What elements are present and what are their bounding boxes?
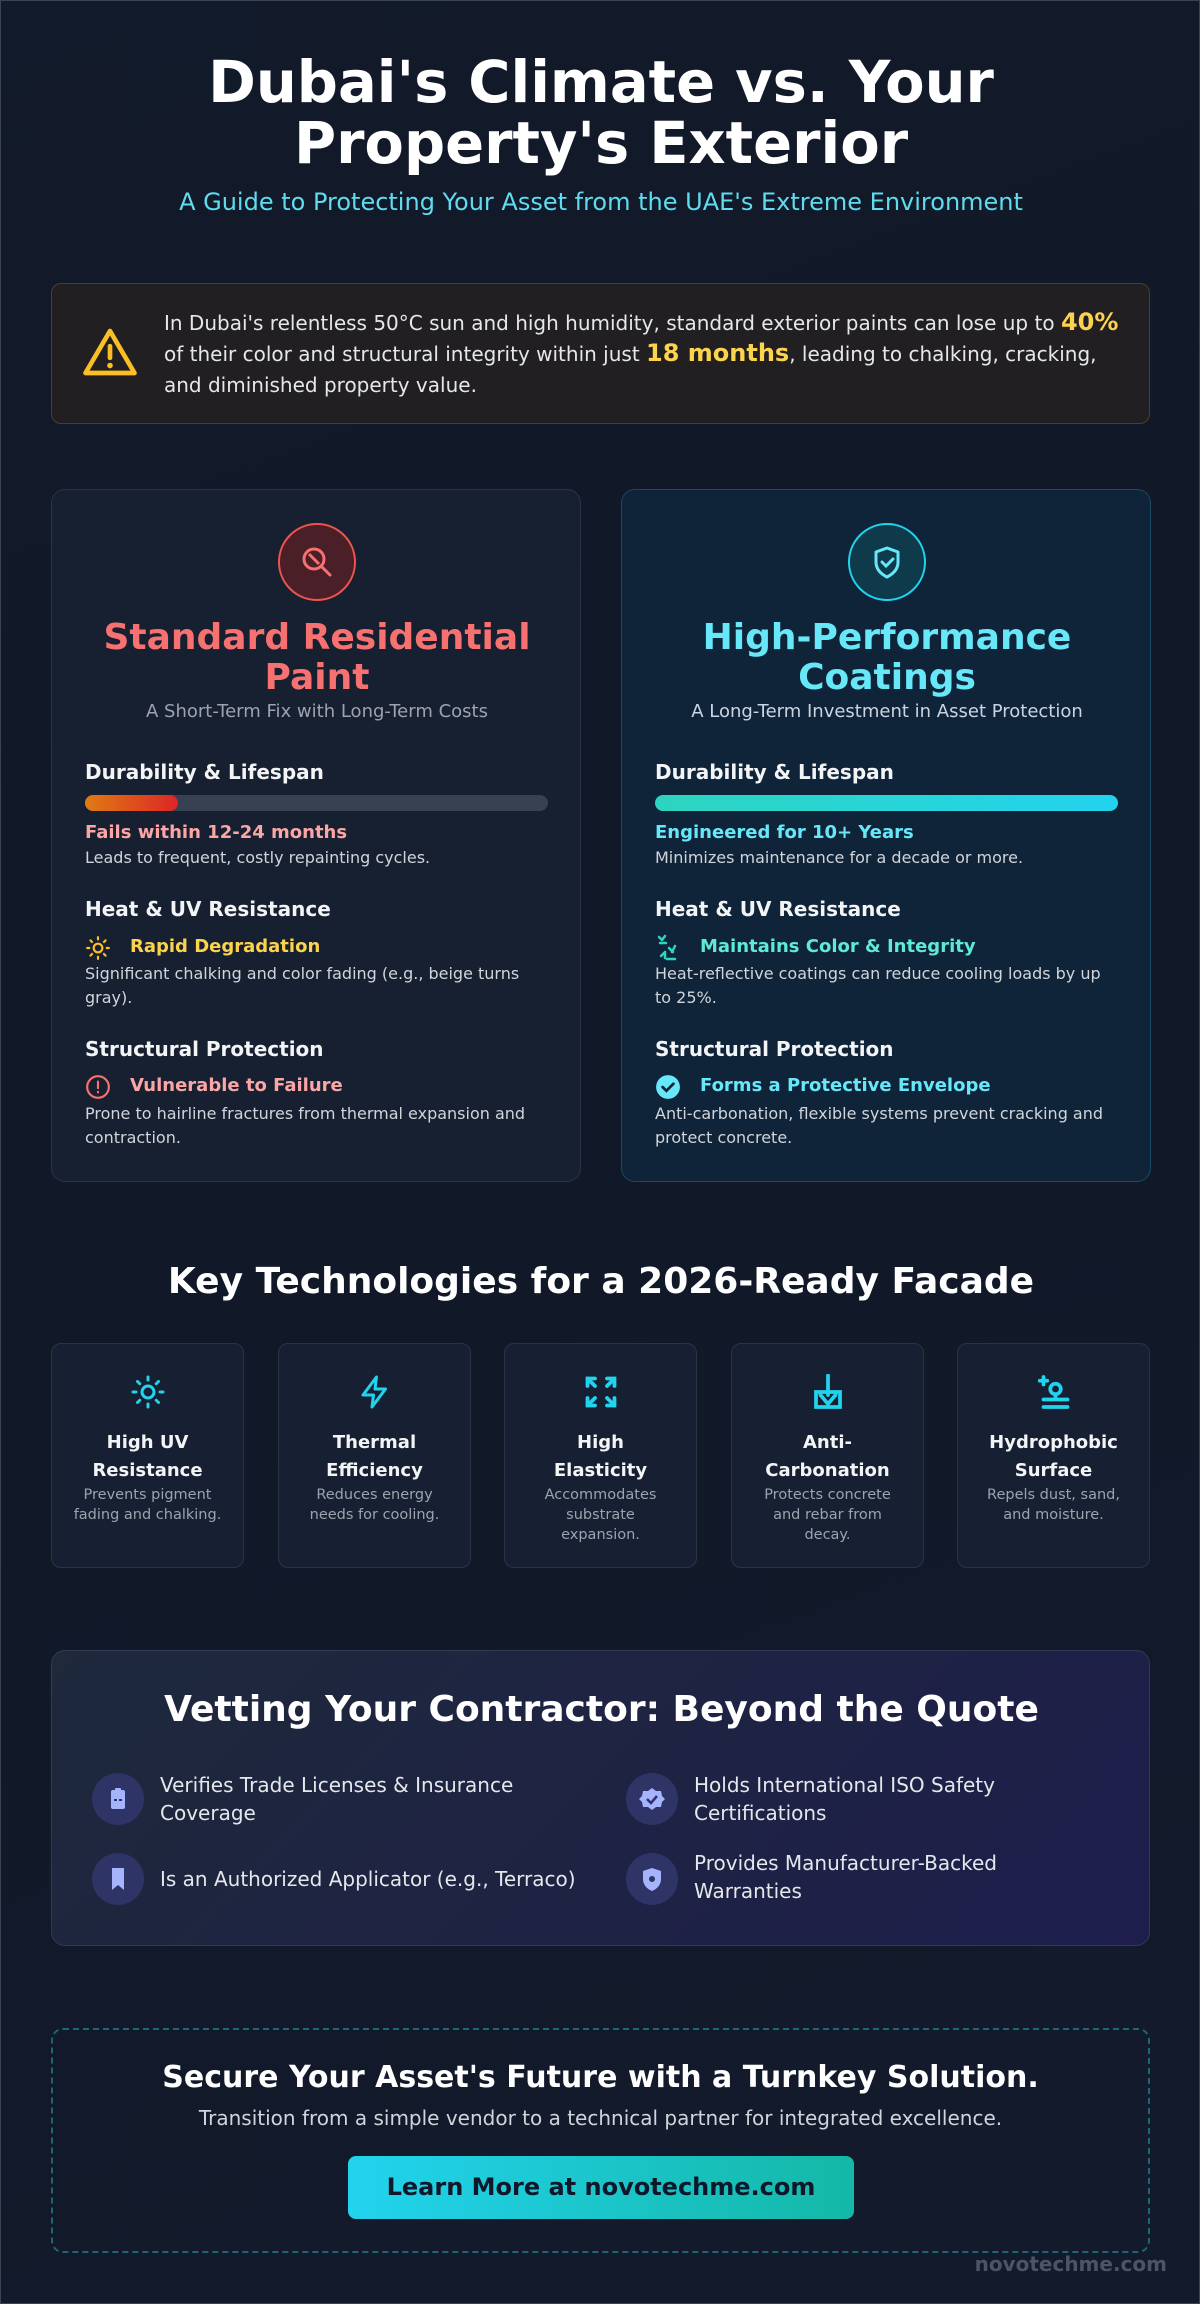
tech card: UV bbox=[51, 1343, 244, 1568]
tech card: UV: High UV bbox=[107, 1432, 188, 1453]
tech card: hydrophobic bbox=[957, 1343, 1150, 1568]
panel: call to action bbox=[51, 2028, 1150, 2253]
tech card: hydrophobic: Hydrophobic bbox=[989, 1432, 1118, 1453]
panel: high performance: Forms a Protective Envelope bbox=[700, 1075, 991, 1096]
panel: standard paint: Leads to frequent, costly repainting cycles. bbox=[85, 848, 430, 867]
card title: High-Performance bbox=[703, 617, 1071, 658]
title: Property's Exterior bbox=[294, 110, 908, 177]
title: Dubai's Climate vs. Your bbox=[208, 49, 994, 116]
card subtitle: A Short-Term Fix with Long-Term Costs bbox=[146, 701, 488, 722]
item: ISO: Holds International ISO Safety Certifications bbox=[694, 1773, 995, 1825]
panel: standard paint: Vulnerable to Failure bbox=[130, 1075, 343, 1096]
icon: check bbox=[656, 1075, 680, 1099]
tech card: anti-carbonation: Carbonation bbox=[765, 1460, 890, 1481]
tech card: hydrophobic: Repels dust, sand, and moisture. bbox=[987, 1487, 1120, 1523]
card title: Standard Residential bbox=[103, 617, 531, 658]
panel: high performance: Maintains Color & Integrity bbox=[700, 936, 976, 957]
item: warranties: Provides Manufacturer-Backed Warranties bbox=[694, 1851, 997, 1903]
label structural: Structural Protection bbox=[85, 1037, 324, 1061]
panel: vetting bbox=[51, 1650, 1150, 1946]
alert text: In Dubai's relentless 50°C sun and high humidity, standard exterior paints can lose up to 40% of their color and structural integrity within just 18 months, leading to chalking, cracking, and diminished property value. bbox=[164, 308, 1118, 397]
button: Learn More at novotechme.com bbox=[387, 2173, 815, 2201]
fails text: Fails within 12-24 months bbox=[85, 822, 347, 843]
card title: Coatings bbox=[798, 657, 976, 698]
icon: sun bbox=[86, 936, 110, 960]
panel: standard paint: Prone to hairline fractures from thermal expansion and contraction. bbox=[85, 1104, 525, 1147]
bar bbox=[85, 795, 548, 811]
item: licenses: Verifies Trade Licenses & Insurance Coverage bbox=[160, 1773, 513, 1825]
card title bbox=[703, 617, 1071, 698]
bar bbox=[655, 795, 1118, 811]
tech card: UV: Prevents pigment fading and chalking. bbox=[74, 1487, 221, 1523]
panel: high performance: Heat-reflective coatings can reduce cooling loads by up to 25%. bbox=[655, 964, 1101, 1007]
tech card: UV: Resistance bbox=[92, 1460, 203, 1481]
subtitle: A Guide to Protecting Your Asset from the UAE's Extreme Environment bbox=[179, 188, 1023, 216]
alert panel bbox=[51, 283, 1150, 424]
panel: high performance bbox=[621, 489, 1151, 1182]
card subtitle: A Long-Term Investment in Asset Protection bbox=[691, 701, 1083, 722]
cta heading: Secure Your Asset's Future with a Turnkey Solution. bbox=[162, 2060, 1039, 2095]
tech card: hydrophobic: Surface bbox=[1015, 1460, 1092, 1481]
icon: shield circle bbox=[848, 523, 926, 601]
panel: high performance: Anti-carbonation, flexible systems prevent cracking and protect concrete. bbox=[655, 1104, 1103, 1147]
tech card: thermal: Reduces energy needs for cooling. bbox=[310, 1487, 439, 1523]
tech card: anti-carbonation bbox=[731, 1343, 924, 1568]
heading: key technologies: Key Technologies for a 2026-Ready Facade bbox=[168, 1261, 1034, 1302]
card title: Paint bbox=[265, 657, 369, 698]
tech card: thermal: Efficiency bbox=[326, 1460, 423, 1481]
cta subtext: Transition from a simple vendor to a technical partner for integrated excellence. bbox=[199, 2106, 1002, 2130]
label durability: Durability & Lifespan bbox=[85, 760, 324, 784]
button bbox=[348, 2156, 854, 2219]
tech card: anti-carbonation: Protects concrete and rebar from decay. bbox=[764, 1487, 891, 1543]
tech card: elasticity: Accommodates substrate expansion. bbox=[545, 1487, 656, 1543]
icon: alert bbox=[86, 1075, 110, 1099]
title bbox=[208, 49, 994, 177]
tech card: elasticity: Elasticity bbox=[554, 1460, 647, 1481]
panel: standard paint: Significant chalking and color fading (e.g., beige turns gray). bbox=[85, 964, 519, 1007]
item: applicator bbox=[92, 1853, 576, 1905]
label durability: Durability & Lifespan bbox=[655, 760, 894, 784]
icon: red circle bbox=[278, 523, 356, 601]
icon: warning bbox=[83, 328, 137, 376]
panel: high performance: Minimizes maintenance for a decade or more. bbox=[655, 848, 1023, 867]
label structural: Structural Protection bbox=[655, 1037, 894, 1061]
tech card: elasticity: High bbox=[577, 1432, 624, 1453]
watermark: novotechme.com bbox=[975, 2252, 1167, 2276]
panel: standard paint bbox=[51, 489, 581, 1182]
engineered text: Engineered for 10+ Years bbox=[655, 822, 914, 843]
tech card: thermal: Thermal bbox=[333, 1432, 416, 1453]
tech card: anti-carbonation: Anti- bbox=[803, 1432, 852, 1453]
panel: standard paint: Rapid Degradation bbox=[130, 936, 320, 957]
label heat: Heat & UV Resistance bbox=[655, 897, 901, 921]
item: applicator: Is an Authorized Applicator (e.g., Terraco) bbox=[160, 1867, 576, 1891]
icon: sparkle bbox=[658, 934, 676, 960]
card title bbox=[103, 617, 531, 698]
tech card: thermal bbox=[278, 1343, 471, 1568]
tech card: elasticity bbox=[504, 1343, 697, 1568]
vetting heading: Vetting Your Contractor: Beyond the Quote bbox=[164, 1689, 1039, 1730]
label heat: Heat & UV Resistance bbox=[85, 897, 331, 921]
